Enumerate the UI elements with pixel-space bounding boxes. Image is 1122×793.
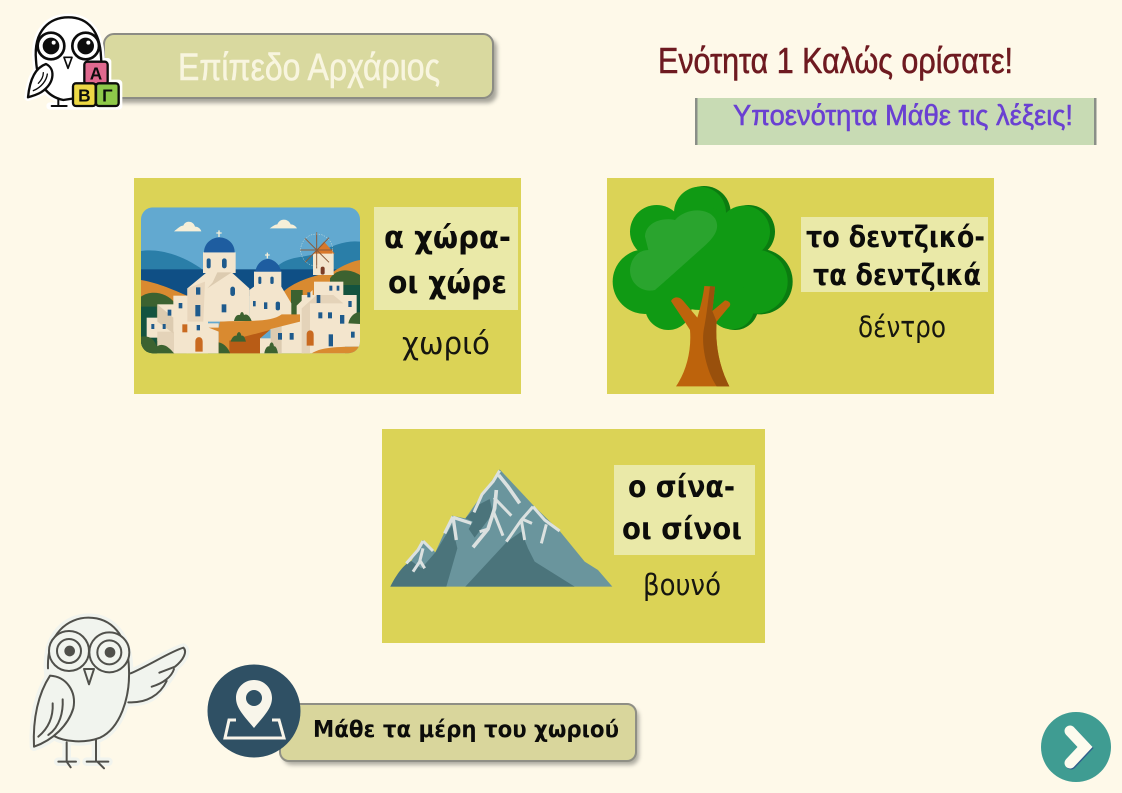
- word box: [801, 217, 988, 292]
- hills and shrubs: [209, 314, 300, 353]
- card: village: [134, 178, 521, 394]
- button: learn village parts: [280, 704, 639, 765]
- snow: [406, 471, 560, 572]
- word box: [614, 465, 755, 555]
- icon: map pin badge: [208, 664, 300, 758]
- translation: δέντρο: [858, 310, 946, 344]
- word box: οι χώρε: [388, 265, 507, 301]
- subsection text: Υποενότητα Μάθε τις λέξεις!: [733, 100, 1073, 132]
- translation: χωριό: [402, 326, 490, 362]
- block letters: Α: [90, 63, 103, 83]
- word box: τα δεντζικά: [813, 258, 981, 292]
- block letters: Γ: [102, 85, 113, 105]
- doors: [195, 330, 314, 352]
- button text: Μάθε τα μέρη του χωριού: [313, 717, 619, 743]
- illustration: greek village: [141, 207, 360, 353]
- level text: Επίπεδο Αρχάριος: [178, 47, 440, 89]
- block letters: [78, 63, 113, 105]
- icon: pointing owl: [34, 618, 185, 768]
- windows: [151, 258, 355, 346]
- subsection banner: [695, 98, 1096, 145]
- section title: Ενότητα 1 Καλώς ορίσατε!: [658, 40, 1013, 81]
- button: next arrow: [1041, 712, 1111, 782]
- trunk: [671, 286, 730, 386]
- illustration: mountain: [390, 469, 612, 587]
- pin: [236, 680, 272, 728]
- windmill sails: [300, 232, 333, 268]
- village buildings: [147, 237, 360, 353]
- word box: [374, 207, 518, 310]
- word box: οι σίνοι: [622, 512, 742, 547]
- translation: βουνό: [643, 568, 721, 602]
- word forms: ο σίνα-: [628, 470, 735, 505]
- crosses: [216, 230, 270, 258]
- level banner: [104, 34, 497, 103]
- map outline: [225, 720, 284, 738]
- word forms: το δεντζικό-: [806, 220, 985, 254]
- word forms: α χώρα-: [384, 220, 511, 256]
- leaf highlight: [630, 210, 717, 291]
- clouds: [174, 222, 201, 231]
- card: mountain: [382, 429, 765, 643]
- card: tree: [607, 178, 994, 394]
- block letters: Β: [78, 85, 91, 105]
- illustration: tree: [613, 186, 793, 386]
- icon: owl with alphabet blocks: [28, 17, 119, 106]
